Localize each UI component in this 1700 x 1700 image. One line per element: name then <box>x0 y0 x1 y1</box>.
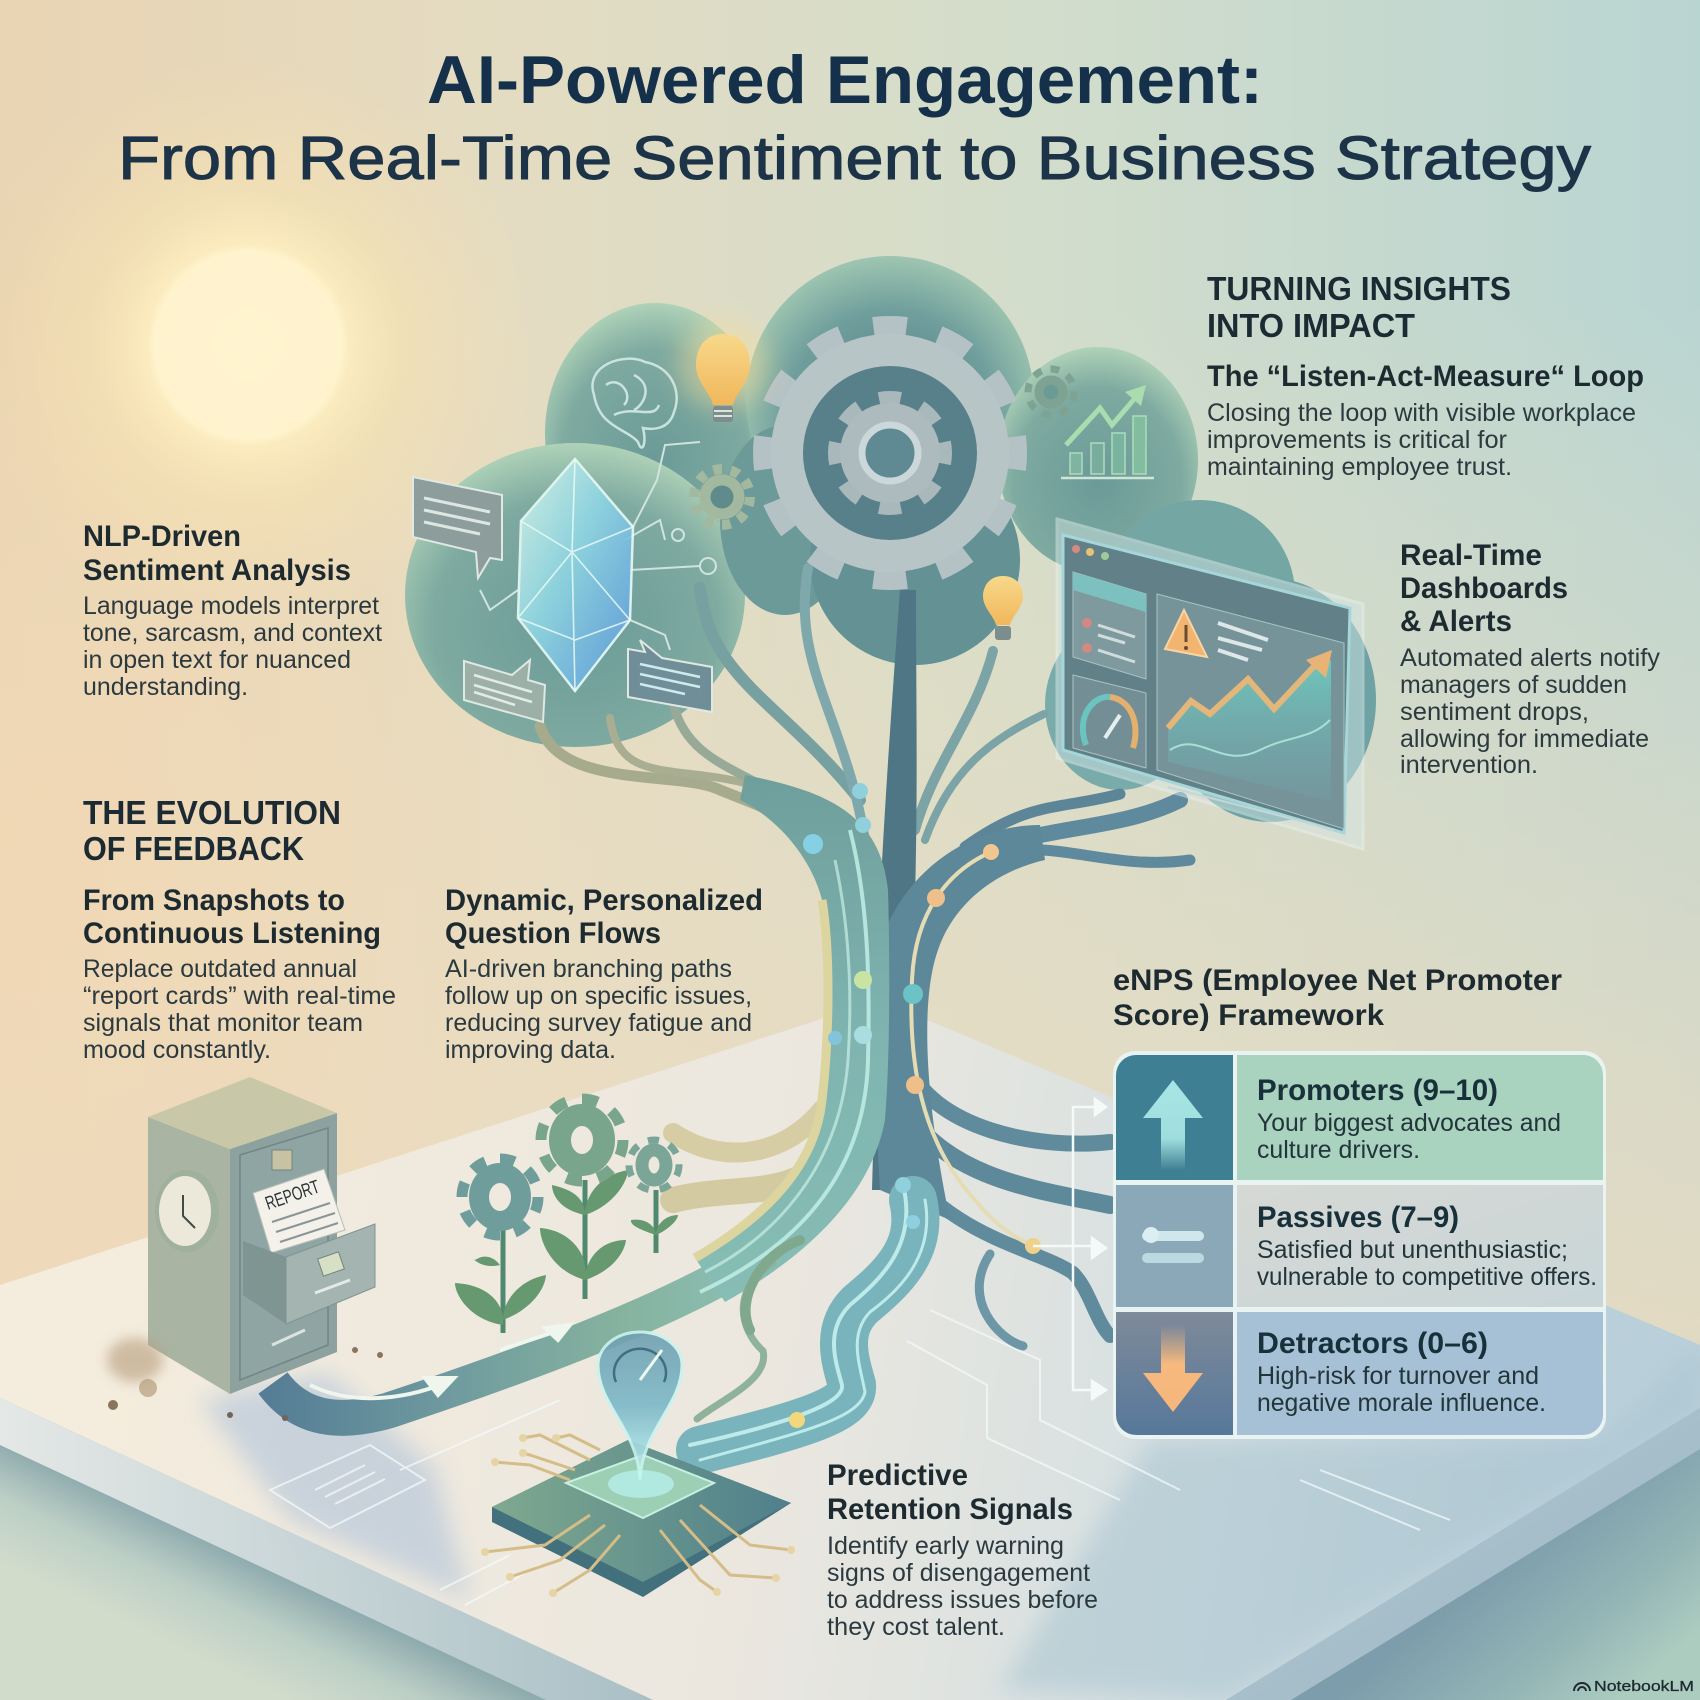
text: real-time dashboards and alerts: & Alerts <box>1400 605 1512 638</box>
text: listen-act-measure loop: The “Listen-Act-Measure“ Loop <box>1207 360 1644 393</box>
icon: filing cabinet with report <box>148 1077 375 1394</box>
text: NLP-driven sentiment analysis: tone, sarcasm, and context <box>83 619 382 647</box>
text: listen-act-measure loop <box>1207 360 1644 481</box>
bracket arrows to eNPS table <box>1033 1099 1106 1399</box>
text: predictive retention signals: they cost talent. <box>827 1613 1005 1641</box>
row: promoters: Your biggest advocates and <box>1257 1109 1561 1137</box>
text: real-time dashboards and alerts: Real-Time <box>1400 539 1542 572</box>
text: dynamic personalized question flows: AI-driven branching paths <box>445 955 732 983</box>
icon: top-right gear <box>1028 369 1074 415</box>
text: NLP-driven sentiment analysis: understanding. <box>83 673 248 701</box>
text: listen-act-measure loop: maintaining employee trust. <box>1207 453 1512 481</box>
text: dynamic personalized question flows: Dynamic, Personalized <box>445 884 763 917</box>
row: passives: Satisfied but unenthusiastic; <box>1257 1236 1568 1264</box>
text: predictive retention signals: Retention Signals <box>827 1493 1073 1526</box>
icon: large gear <box>764 327 1016 579</box>
row: detractors: Detractors (0–6) <box>1257 1327 1488 1360</box>
text: dynamic personalized question flows: Question Flows <box>445 917 661 950</box>
title: AI-Powered Engagement: <box>427 42 1263 118</box>
row: passives <box>1116 1185 1603 1307</box>
row: detractors: negative morale influence. <box>1257 1389 1546 1417</box>
row: promoters: culture drivers. <box>1257 1136 1420 1164</box>
text: NLP-driven sentiment analysis: Sentiment Analysis <box>83 554 351 587</box>
text: NLP-driven sentiment analysis: NLP-Driven <box>83 520 241 553</box>
row: detractors <box>1116 1312 1603 1435</box>
stream from tree to chip <box>690 1185 927 1460</box>
dust around cabinet <box>107 1338 383 1421</box>
row: promoters <box>1116 1055 1603 1180</box>
section heading: turning insights into impact: TURNING INSIGHTS <box>1207 270 1511 307</box>
stream nodes <box>789 783 1041 1428</box>
text: real-time dashboards and alerts: intervention. <box>1400 751 1538 779</box>
report sheet <box>253 1169 345 1253</box>
text: predictive retention signals: Predictive <box>827 1459 968 1492</box>
section heading: turning insights into impact <box>1207 270 1511 344</box>
row: detractors: High-risk for turnover and <box>1257 1362 1539 1390</box>
icon: light bulb lower <box>983 576 1023 640</box>
text: NLP-driven sentiment analysis <box>83 520 382 701</box>
text: real-time dashboards and alerts <box>1400 539 1660 779</box>
heading: eNPS framework <box>1113 964 1562 1032</box>
text: from snapshots to continuous listening: From Snapshots to <box>83 884 345 917</box>
dashboard panel: chart <box>1157 594 1344 830</box>
text: from snapshots to continuous listening: Replace outdated annual <box>83 955 357 983</box>
section heading: the evolution of feedback <box>83 794 341 867</box>
speech bubble B <box>464 660 545 722</box>
heading: eNPS framework: Score) Framework <box>1113 999 1384 1032</box>
watermark: NotebookLM: NotebookLM <box>1594 1678 1694 1695</box>
tree canopy <box>405 256 1376 822</box>
section heading: the evolution of feedback: OF FEEDBACK <box>83 830 304 867</box>
sun <box>0 55 538 635</box>
text: predictive retention signals: to address issues before <box>827 1586 1098 1614</box>
speech bubble C <box>628 640 712 712</box>
text: real-time dashboards and alerts: allowing for immediate <box>1400 725 1649 753</box>
text: listen-act-measure loop: improvements is critical for <box>1207 426 1507 454</box>
tree central trunk <box>872 590 917 1190</box>
speech bubble A <box>413 477 502 578</box>
report sheet: REPORT <box>263 1177 323 1215</box>
text: from snapshots to continuous listening: Continuous Listening <box>83 917 381 950</box>
icon: chip with predictive gauge pin <box>481 1332 795 1597</box>
text: from snapshots to continuous listening: signals that monitor team <box>83 1009 363 1037</box>
row: passives: vulnerable to competitive offers. <box>1257 1263 1597 1291</box>
text: real-time dashboards and alerts: managers of sudden <box>1400 671 1627 699</box>
icon: growth chart <box>1061 385 1154 478</box>
section heading: turning insights into impact: INTO IMPACT <box>1207 307 1415 344</box>
heading: eNPS framework: eNPS (Employee Net Promoter <box>1113 964 1562 997</box>
title <box>118 42 1592 192</box>
alert icon <box>1165 610 1207 657</box>
icon: sprouting gear flowers <box>455 1099 679 1333</box>
text: predictive retention signals <box>827 1459 1098 1641</box>
icon: small gear <box>694 469 750 525</box>
platform <box>0 1000 1700 1700</box>
dashboard card: list <box>1073 572 1146 679</box>
icon: light bulb top <box>678 320 768 422</box>
text: predictive retention signals: Identify early warning <box>827 1532 1064 1560</box>
row: passives: Passives (7–9) <box>1257 1201 1459 1234</box>
text: predictive retention signals: signs of disengagement <box>827 1559 1090 1587</box>
icon: crystal <box>518 459 633 691</box>
title: From Real-Time Sentiment to Business Strategy <box>118 124 1592 192</box>
text: from snapshots to continuous listening: “report cards” with real-time <box>83 982 396 1010</box>
dashboard card: gauge <box>1073 675 1146 768</box>
text: real-time dashboards and alerts: sentiment drops, <box>1400 698 1589 726</box>
icon: brain <box>592 359 677 448</box>
stream arrows <box>310 1325 570 1398</box>
text: real-time dashboards and alerts: Automated alerts notify <box>1400 644 1660 672</box>
tree right limb and blue roots <box>875 825 1110 1346</box>
tree branches <box>540 568 1190 862</box>
text: dynamic personalized question flows: follow up on specific issues, <box>445 982 752 1010</box>
circuit traces on platform <box>270 1310 1450 1605</box>
eNPS table <box>1113 1051 1606 1439</box>
text: dynamic personalized question flows: reducing survey fatigue and <box>445 1009 752 1037</box>
text: NLP-driven sentiment analysis: Language models interpret <box>83 592 379 620</box>
text: from snapshots to continuous listening: mood constantly. <box>83 1036 271 1064</box>
text: NLP-driven sentiment analysis: in open text for nuanced <box>83 646 351 674</box>
row: promoters: Promoters (9–10) <box>1257 1074 1498 1107</box>
text: dynamic personalized question flows: improving data. <box>445 1036 616 1064</box>
section heading: the evolution of feedback: THE EVOLUTION <box>83 794 341 831</box>
text: from snapshots to continuous listening <box>83 884 396 1064</box>
stream from filing cabinet into tree <box>273 775 889 1418</box>
tan roots <box>673 1110 823 1200</box>
text: listen-act-measure loop: Closing the loop with visible workplace <box>1207 399 1636 427</box>
dashboard screen <box>1057 519 1363 849</box>
circuit lines around crystal <box>480 442 716 650</box>
text: real-time dashboards and alerts: Dashboards <box>1400 572 1568 605</box>
clock <box>155 1170 219 1252</box>
text: dynamic personalized question flows <box>445 884 763 1064</box>
